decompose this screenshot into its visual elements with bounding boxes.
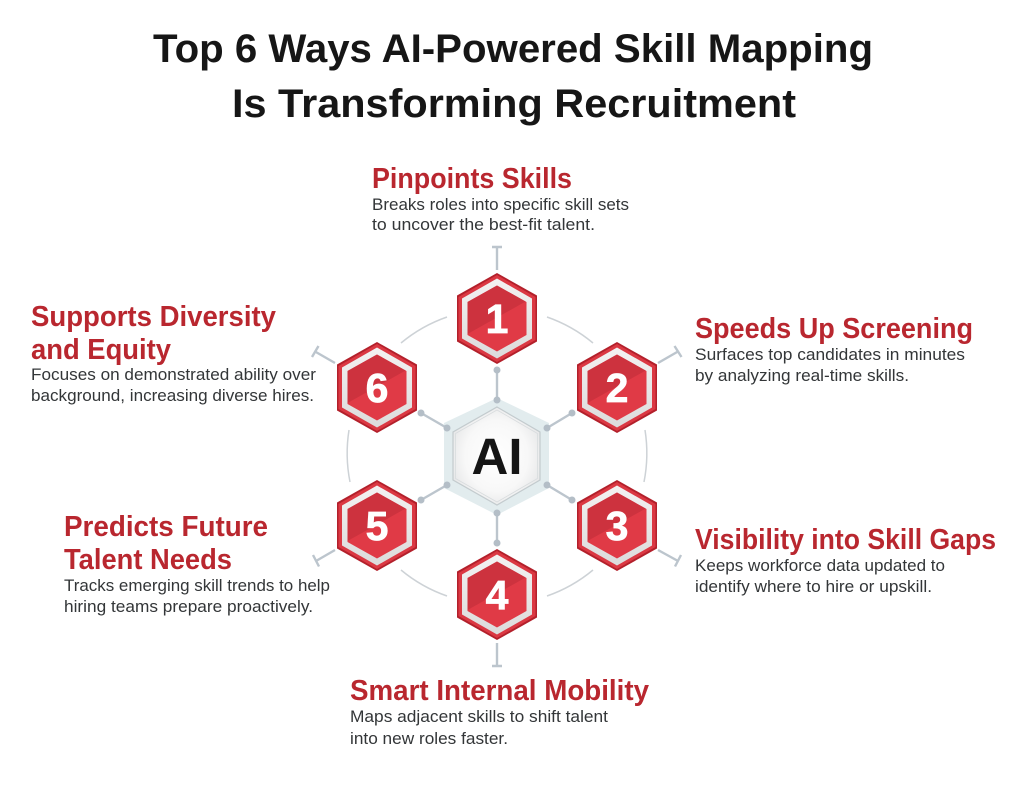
outer connector: lower left <box>313 550 335 566</box>
badge 4 <box>457 549 537 640</box>
text block 6: Supports Diversity and Equity: Supports Diversity <box>31 301 276 333</box>
text block 3: Visibility into Skill Gaps: identify where to hire or upskill. <box>695 578 932 596</box>
badge 3: 3 <box>606 503 628 549</box>
badge 2 <box>577 342 657 433</box>
badge 2: 2 <box>606 365 628 411</box>
text block 6: Supports Diversity and Equity: Focuses on demonstrated ability over <box>31 366 317 384</box>
outer connector: upper left <box>312 346 335 363</box>
text block 5: Predicts Future Talent Needs <box>64 511 330 616</box>
outer connector: lower right <box>658 550 681 566</box>
text block 1: Pinpoints Skills: Breaks roles into specific skill sets <box>372 196 629 214</box>
text block 5: Predicts Future Talent Needs: Predicts Future <box>64 511 268 543</box>
badge 6: 6 <box>366 365 388 411</box>
text block 4: Smart Internal Mobility <box>350 675 649 748</box>
central AI hexagon: AI <box>472 428 522 485</box>
title: Is Transforming Recruitment <box>232 82 796 126</box>
text block 2: Speeds Up Screening: Speeds Up Screening <box>695 313 973 345</box>
text block 3: Visibility into Skill Gaps: Visibility into Skill Gaps <box>695 524 996 556</box>
title <box>153 27 873 126</box>
central AI hexagon <box>444 398 549 515</box>
text block 6: Supports Diversity and Equity <box>31 301 317 405</box>
inner connectors with dots <box>418 366 576 546</box>
text block 4: Smart Internal Mobility: into new roles faster. <box>350 730 508 748</box>
badge 6 <box>337 342 417 433</box>
badge 5: 5 <box>366 503 388 549</box>
badge 1 <box>457 273 537 364</box>
text block 6: Supports Diversity and Equity: background, increasing diverse hires. <box>31 387 314 405</box>
badge 4: 4 <box>486 572 509 618</box>
text block 2: Speeds Up Screening: by analyzing real-time skills. <box>695 367 909 385</box>
text block 3: Visibility into Skill Gaps: Keeps workforce data updated to <box>695 557 945 575</box>
text block 1: Pinpoints Skills: Pinpoints Skills <box>372 163 572 195</box>
text block 1: Pinpoints Skills <box>372 163 629 234</box>
outer connector: bottom <box>492 643 502 666</box>
badge 1: 1 <box>486 296 508 342</box>
title: Top 6 Ways AI-Powered Skill Mapping <box>153 27 873 71</box>
text block 4: Smart Internal Mobility: Smart Internal Mobility <box>350 675 649 707</box>
text block 3: Visibility into Skill Gaps <box>695 524 996 596</box>
outer connector: top <box>492 247 502 270</box>
text block 4: Smart Internal Mobility: Maps adjacent skills to shift talent <box>350 708 608 726</box>
badge 5 <box>337 480 417 571</box>
text block 5: Predicts Future Talent Needs: Talent Needs <box>64 544 232 576</box>
text block 1: Pinpoints Skills: to uncover the best-fit talent. <box>372 216 595 234</box>
text block 6: Supports Diversity and Equity: and Equity <box>31 334 171 366</box>
text block 2: Speeds Up Screening: Surfaces top candidates in minutes <box>695 346 965 364</box>
orbit arcs <box>347 317 647 596</box>
text block 5: Predicts Future Talent Needs: hiring teams prepare proactively. <box>64 598 313 616</box>
text block 5: Predicts Future Talent Needs: Tracks emerging skill trends to help <box>64 577 330 595</box>
badge 3 <box>577 480 657 571</box>
outer connector: upper right <box>658 346 682 363</box>
text block 2: Speeds Up Screening <box>695 313 973 385</box>
